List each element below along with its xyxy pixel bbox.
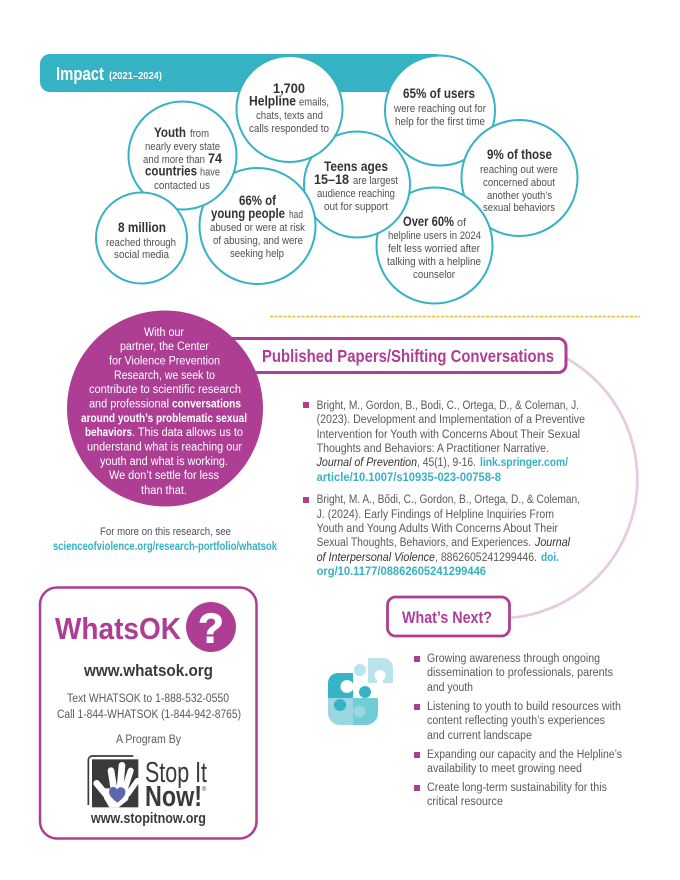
program by line: A Program By — [116, 734, 181, 746]
purple research circle: for Violence Prevention — [109, 356, 220, 368]
stat circle: over 60%: Over 60% — [403, 214, 454, 229]
purple research circle: With our — [144, 327, 184, 339]
stat circle: 1,700 helpline: emails, — [299, 96, 329, 108]
stat circle: teens ages 15-18: out for support — [324, 201, 388, 213]
stat circle: over 60%: of — [457, 217, 467, 229]
icon: stop it now hand logo — [88, 756, 138, 807]
reference one: Journal of Prevention — [316, 457, 417, 469]
reference one: article/10.1007/s10935-023-00758-8 — [317, 472, 502, 484]
purple research circle: understand what is reaching our — [87, 442, 242, 454]
stat circle: youth from 74 countries: have — [200, 166, 220, 178]
what's next bullet two: and current landscape — [427, 730, 532, 742]
reference two: of Interpersonal Violence — [317, 552, 435, 564]
research portfolio note: For more on this research, see — [100, 526, 231, 538]
stat circle: 9% of those: sexual behaviors — [483, 202, 556, 214]
reference two: org/10.1177/08862605241299446 — [317, 566, 486, 578]
purple research circle: conversations — [172, 398, 241, 410]
stat circle: over 60%: counselor — [413, 269, 455, 281]
stat circle: 8 million: 8 million — [118, 220, 166, 235]
what's next bullet two: content reflecting youth’s experiences — [427, 715, 605, 727]
stat circle: 65% of users — [385, 56, 495, 166]
stat circle: 9% of those: reaching out were — [480, 164, 558, 176]
stat circle: 66% of young people: of abusing, and were — [213, 235, 303, 247]
what's next bullet one: dissemination to professionals, parents — [427, 667, 613, 679]
reference one: (2023). Development and Implementation of a Preventive — [317, 414, 585, 426]
purple research circle — [67, 310, 263, 506]
what's next bullet two — [414, 701, 621, 742]
reference two: doi. — [541, 552, 559, 564]
reference one: Bright, M., Gordon, B., Bodi, C., Ortega, D., & Coleman, J. — [317, 400, 579, 412]
purple research circle: behaviors — [85, 427, 132, 439]
stat circle: over 60%: talking with a helpline — [387, 256, 481, 268]
icon: question mark circle — [186, 602, 236, 652]
stat circle: youth from 74 countries: contacted us — [154, 180, 211, 192]
stat circle: 66% of young people: 66% of — [239, 193, 276, 208]
reference two: Youth and Young Adults With Concerns About Their — [317, 523, 558, 535]
purple research circle: youth and what is working. — [100, 456, 228, 468]
purple research circle: and professional — [89, 398, 169, 410]
purple research circle: Research, we seek to — [114, 370, 215, 382]
stat circle: youth from 74 countries: Youth — [154, 125, 186, 140]
what's next bullet four: critical resource — [427, 796, 503, 808]
stat circle: 66% of young people — [200, 168, 316, 284]
stat circle: youth from 74 countries: and more than — [143, 154, 205, 166]
reference one — [303, 400, 585, 484]
what's next bullet one: and youth — [427, 682, 473, 694]
what's next bullet three: availability to meet growing need — [427, 763, 582, 775]
stat circle: youth from 74 countries: nearly every state — [145, 141, 220, 153]
what's next bullet two: Listening to youth to build resources with — [427, 701, 621, 713]
reference two: Journal — [534, 537, 570, 549]
reference one: Intervention for Youth with Concerns About Their Sexual — [317, 429, 580, 441]
stat circle: 1,700 helpline — [236, 56, 342, 162]
reference two — [303, 494, 580, 578]
dotted divider — [270, 316, 640, 318]
purple research circle: around youth’s problematic sexual — [81, 413, 247, 425]
stat circle: 9% of those: 9% of those — [487, 147, 552, 162]
stat circle: over 60%: helpline users in 2024 — [388, 230, 481, 242]
stat circle: youth from 74 countries: countries — [145, 164, 197, 178]
what's next bullet four: Create long-term sustainability for this — [427, 782, 607, 794]
stat circle: 9% of those: another youth’s — [487, 190, 553, 202]
stat circle: teens ages 15-18: Teens ages — [324, 159, 388, 174]
stat circle: teens ages 15-18 — [304, 132, 410, 238]
stop it wordmark: Stop It — [145, 757, 207, 789]
research portfolio note: scienceofviolence.org/research-portfolio/whatsok — [53, 541, 277, 553]
what's next heading box — [388, 597, 510, 636]
stat circle: 1,700 helpline: chats, texts and — [256, 110, 323, 122]
icon: question mark circle: ? — [198, 604, 224, 652]
impact banner — [40, 54, 438, 92]
stat circle: teens ages 15-18: audience reaching — [317, 188, 395, 200]
stat circle: 1,700 helpline: Helpline — [249, 94, 296, 108]
stat circle: 65% of users: 65% of users — [403, 86, 475, 101]
what's next bullet three: Expanding our capacity and the Helpline’s — [427, 749, 622, 761]
text line: Text WHATSOK to 1-888-532-0550 — [67, 693, 229, 705]
call line: Call 1-844-WHATSOK (1-844-942-8765) — [57, 709, 241, 721]
purple research circle: than that. — [141, 485, 187, 497]
stat circle: 66% of young people: seeking help — [230, 248, 284, 260]
registered mark: ® — [202, 786, 207, 793]
reference one: , 45(1), 9-16. — [417, 457, 476, 469]
stop it now url: www.stopitnow.org — [90, 810, 206, 827]
website url: www.whatsok.org — [83, 661, 213, 680]
stat circle: 1,700 helpline: calls responded to — [249, 123, 329, 135]
published papers heading box — [225, 338, 566, 372]
stat circle: youth from 74 countries: from — [190, 128, 209, 140]
research portfolio note — [53, 526, 277, 553]
reference two: , 8862605241299446. — [435, 552, 537, 564]
what's next bullet one — [414, 653, 613, 694]
stat circle: youth from 74 countries: 74 — [208, 151, 222, 166]
stat circle: teens ages 15-18: 15–18 — [314, 172, 349, 187]
stat circle: 65% of users: were reaching out for — [393, 103, 486, 115]
stat circle: 9% of those — [462, 120, 578, 236]
stat circle: 9% of those: concerned about — [483, 177, 555, 189]
stat circle: 66% of young people: young people — [211, 206, 285, 221]
stat circle: youth from 74 countries — [128, 102, 236, 210]
what's next bullet one: Growing awareness through ongoing — [427, 653, 600, 665]
connector arc — [509, 358, 637, 618]
stat circle: over 60%: felt less worried after — [388, 243, 480, 255]
what's next bullet four — [414, 782, 607, 808]
what's next bullet three — [414, 749, 622, 775]
impact heading: Impact — [56, 64, 104, 84]
purple research circle: partner, the Center — [120, 341, 209, 353]
impact date range: (2021–2024) — [109, 71, 162, 82]
whatsok wordmark: WhatsOK — [55, 611, 182, 646]
purple research circle: . This data allows us to — [132, 427, 243, 439]
reference two: J. (2024). Early Findings of Helpline Inquiries From — [317, 509, 554, 521]
what's next heading box: What’s Next? — [402, 609, 492, 627]
stat circle: 66% of young people: abused or were at risk — [210, 222, 306, 234]
stat circle: 65% of users: help for the first time — [395, 116, 485, 128]
reference two: Bright, M. A., Bődi, C., Gordon, B., Ortega, D., & Coleman, — [317, 494, 580, 506]
reference one: Thoughts and Behaviors: A Practitioner Narrative. — [317, 443, 549, 455]
purple research circle: contribute to scientific research — [89, 384, 241, 396]
now wordmark: Now! — [145, 781, 202, 813]
stat circle: over 60% — [376, 188, 492, 304]
stat circle: 1,700 helpline: 1,700 — [273, 81, 305, 96]
purple research circle: We don’t settle for less — [109, 470, 219, 482]
icon: puzzle pieces — [328, 658, 393, 725]
published papers heading box: Published Papers/Shifting Conversations — [262, 346, 554, 366]
stat circle: teens ages 15-18: are largest — [353, 175, 398, 187]
stat circle: 8 million: reached through — [106, 237, 176, 249]
stat circle: 8 million — [96, 192, 187, 284]
reference one: link.springer.com/ — [480, 457, 569, 469]
stat circle: 8 million: social media — [114, 249, 169, 261]
panel: whatsok contact card — [40, 588, 256, 838]
reference two: Sexual Thoughts, Behaviors, and Experiences. — [317, 537, 531, 549]
stat circle: 66% of young people: had — [289, 209, 303, 221]
